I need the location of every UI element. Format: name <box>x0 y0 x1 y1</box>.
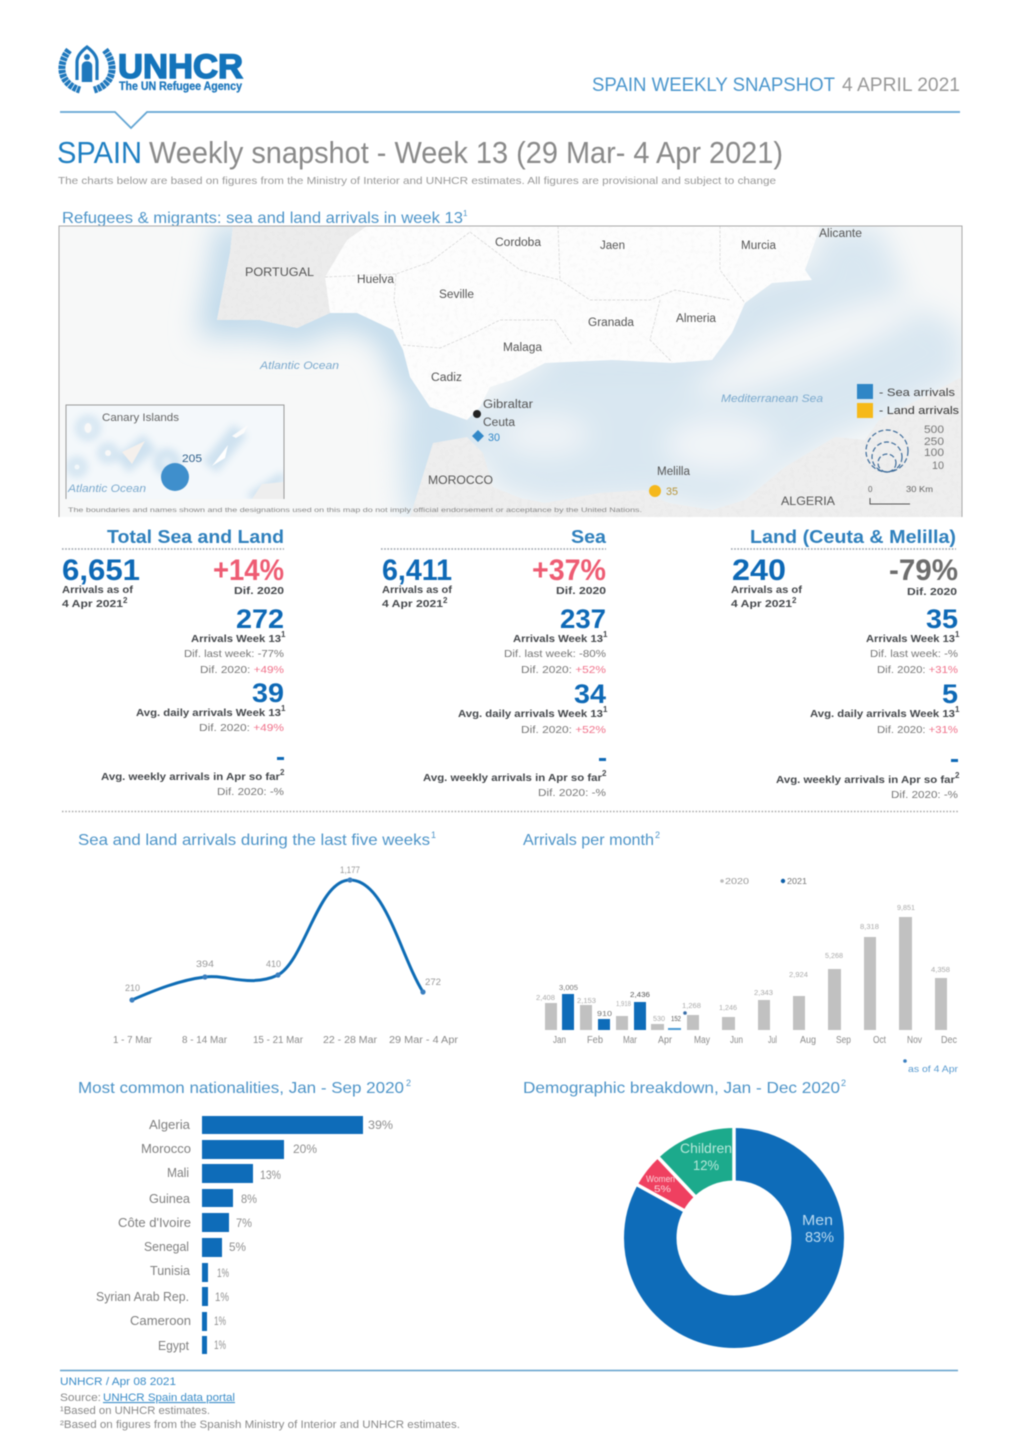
bar values: 1,918 <box>616 1001 631 1008</box>
map place labels: Malaga <box>503 342 543 354</box>
heading: arrivals per month: Arrivals per month <box>523 832 654 849</box>
arrivals week 13 <box>504 604 608 676</box>
heading: arrivals per month: 2 <box>655 830 660 840</box>
sea labels: Mediterranean Sea <box>721 393 823 405</box>
arrivals week 13: 1 <box>281 630 286 639</box>
average weekly: 2 <box>280 768 285 777</box>
average weekly: Avg. weekly arrivals in Apr so far <box>423 772 602 784</box>
bar values: 1,268 <box>682 1003 701 1010</box>
percentage labels: 1% <box>215 1292 229 1304</box>
percentage labels: 13% <box>260 1170 281 1182</box>
inset sea label: Atlantic Ocean <box>67 483 146 495</box>
bar values: 1,246 <box>719 1005 737 1012</box>
panel: sea <box>381 527 608 799</box>
total arrivals <box>382 554 453 610</box>
average daily: 1 <box>281 704 286 713</box>
map place labels: Melilla <box>657 466 691 478</box>
footer source: UNHCR Spain data portal <box>103 1392 235 1404</box>
map place labels: Granada <box>588 317 635 329</box>
map place labels: Jaen <box>600 240 625 252</box>
average weekly <box>101 757 285 798</box>
bar values: 530 <box>653 1016 665 1023</box>
total arrivals: 240 <box>732 554 786 587</box>
month labels <box>553 1035 957 1046</box>
map disclaimer: The boundaries and names shown and the designations used on this map do not imply official endorsement or acceptance by the United Nations. <box>68 507 642 514</box>
map legend: - Land arrivals <box>879 405 960 417</box>
map place labels: Almeria <box>676 313 717 325</box>
line chart: last five weeks: 272 <box>425 977 441 987</box>
line chart: last five weeks: 15 - 21 Mar <box>253 1035 304 1046</box>
logo tagline: The UN Refugee Agency <box>119 81 243 93</box>
total arrivals: Arrivals as of <box>382 584 453 596</box>
average daily: 39 <box>252 678 284 708</box>
month labels: May <box>694 1035 710 1046</box>
subtitle: The charts below are based on figures from the Ministry of Interior and UNHCR estimates. All figures are provisional and subject to change <box>58 175 776 187</box>
heading: Total Sea and Land <box>107 527 284 547</box>
line chart: last five weeks: 8 - 14 Mar <box>182 1035 228 1046</box>
line chart: last five weeks: 1 - 7 Mar <box>113 1035 153 1046</box>
average daily: Dif. 2020: +49% <box>199 722 284 734</box>
heading: demographic: Demographic breakdown, Jan - Dec 2020 <box>523 1080 840 1097</box>
average daily: 1 <box>603 705 608 714</box>
header label: SPAIN WEEKLY SNAPSHOT <box>592 75 835 96</box>
month labels: Oct <box>873 1035 886 1046</box>
panel: total sea and land <box>62 527 286 798</box>
country labels: Syrian Arab Rep. <box>96 1290 189 1304</box>
map place labels: PORTUGAL <box>245 267 315 279</box>
heading: five weeks: 1 <box>431 830 436 840</box>
line chart: last five weeks: 22 - 28 Mar <box>323 1035 378 1046</box>
logo wordmark: UNHCR <box>118 48 243 86</box>
label: women <box>646 1174 675 1194</box>
label: men: 83% <box>805 1229 834 1246</box>
percentage labels: 5% <box>229 1242 246 1254</box>
inset: Canary Islands <box>66 405 284 499</box>
country labels: Guinea <box>149 1192 190 1206</box>
line chart: last five weeks <box>113 865 459 1046</box>
average daily: Dif. 2020: +52% <box>521 724 606 736</box>
average weekly: Dif. 2020: -% <box>538 787 606 799</box>
bar values: 8,318 <box>860 924 879 931</box>
average weekly <box>423 758 607 799</box>
average weekly <box>776 759 960 801</box>
total arrivals: 6,411 <box>382 554 452 587</box>
bar values: 2,153 <box>577 998 596 1005</box>
land: Spain <box>326 226 820 420</box>
average daily: 34 <box>574 679 606 709</box>
line chart: last five weeks: 410 <box>266 959 281 969</box>
average weekly: Avg. weekly arrivals in Apr so far <box>776 774 955 786</box>
total arrivals: Arrivals as of <box>62 584 134 596</box>
bar values: 4,358 <box>931 967 950 974</box>
difference 2020: Dif. 2020 <box>234 585 284 597</box>
inset title: Canary Islands <box>102 412 180 424</box>
land: Portugal <box>217 226 367 328</box>
difference 2020: Dif. 2020 <box>556 585 606 597</box>
map legend <box>857 384 960 418</box>
average daily: Avg. daily arrivals Week 13 <box>136 707 281 719</box>
map place labels: ALGERIA <box>781 496 835 508</box>
month labels: Aug <box>800 1035 816 1046</box>
total arrivals: 2 <box>443 596 448 605</box>
month labels: Feb <box>587 1035 603 1046</box>
footnote 2: ²Based on figures from the Spanish Ministry of Interior and UNHCR estimates. <box>60 1419 460 1431</box>
total arrivals: Arrivals as of <box>731 584 803 596</box>
bars 2021 <box>562 994 681 1030</box>
bar values: 2,408 <box>536 995 555 1002</box>
sea glow <box>217 226 962 517</box>
country labels: Cameroon <box>130 1314 191 1328</box>
country labels: Algeria <box>149 1118 190 1132</box>
arrivals week 13 <box>866 604 960 676</box>
scale bar <box>868 485 933 504</box>
title: Weekly snapshot - Week 13 (29 Mar- 4 Apr 2021) <box>149 135 783 170</box>
percentage labels: 1% <box>217 1268 229 1280</box>
arrivals week 13: Dif. last week: -77% <box>184 648 284 660</box>
marker: Ceuta sea arrivals: 30 <box>488 432 500 444</box>
proportional symbol legend <box>866 424 944 472</box>
arrivals week 13: Arrivals Week 13 <box>513 633 603 645</box>
heading: nationalities: 2 <box>406 1078 411 1088</box>
chart legend: 2020 <box>725 877 750 886</box>
percentage labels: 39% <box>368 1120 393 1132</box>
label: children: 12% <box>693 1157 719 1173</box>
bar values: 5,268 <box>825 953 843 960</box>
average daily: 1 <box>955 705 960 714</box>
bar chart: arrivals per month <box>536 877 958 1075</box>
arrivals week 13: 1 <box>603 630 608 639</box>
bars <box>202 1116 363 1354</box>
percentage labels: 1% <box>214 1340 226 1352</box>
map place labels: Cordoba <box>495 237 542 249</box>
map legend: - Sea arrivals <box>879 387 956 399</box>
donut chart: demographic breakdown <box>634 1122 834 1322</box>
country labels: Senegal <box>144 1240 189 1254</box>
label: men <box>802 1212 834 1246</box>
country labels: Mali <box>167 1166 189 1180</box>
title: SPAIN <box>57 135 142 170</box>
arrivals week 13: 237 <box>560 604 606 634</box>
bar values: 3,005 <box>559 985 578 992</box>
heading: nationalities: Most common nationalities, Jan - Sep 2020 <box>78 1080 404 1097</box>
map place labels: Seville <box>439 289 474 301</box>
arrivals week 13: Dif. 2020: +52% <box>521 664 606 676</box>
arrivals week 13: Dif. last week: -80% <box>504 648 606 660</box>
average daily: Avg. daily arrivals Week 13 <box>458 708 603 720</box>
label: children <box>680 1140 732 1173</box>
bar values <box>536 905 950 1023</box>
country labels: Tunisia <box>150 1264 190 1278</box>
map place labels: Murcia <box>741 240 777 252</box>
map place labels: Alicante <box>819 228 862 240</box>
sea labels: Atlantic Ocean <box>259 360 339 372</box>
arrivals week 13: 35 <box>926 604 958 634</box>
total arrivals <box>731 554 803 610</box>
average daily <box>458 679 608 736</box>
map place labels: Gibraltar <box>483 399 533 411</box>
chart note <box>903 1059 958 1075</box>
chart legend: 2021 <box>787 877 808 886</box>
marker: Canary Islands sea arrivals <box>161 453 202 491</box>
proportional symbol legend: 100 <box>924 447 944 459</box>
arrivals week 13 <box>184 604 286 676</box>
arrivals week 13: Dif. 2020: +31% <box>877 664 958 676</box>
average weekly: Avg. weekly arrivals in Apr so far <box>101 771 280 783</box>
total arrivals: 6,651 <box>62 554 140 587</box>
header: logo <box>62 47 243 93</box>
country labels: Côte d'Ivoire <box>118 1216 191 1230</box>
month labels: Dec <box>941 1035 957 1046</box>
label: children: Children <box>680 1140 732 1156</box>
bar values: 2,343 <box>754 990 773 997</box>
land: Africa <box>410 377 962 517</box>
header label: 4 APRIL 2021 <box>842 75 960 96</box>
arrivals week 13: 272 <box>236 604 284 634</box>
line chart: last five weeks: 29 Mar - 4 Apr <box>389 1035 459 1046</box>
average weekly: Dif. 2020: -% <box>217 786 284 798</box>
map place labels: MOROCCO <box>428 475 493 487</box>
month labels: Mar <box>623 1035 638 1046</box>
arrivals week 13: Arrivals Week 13 <box>866 633 955 645</box>
month labels: Nov <box>907 1035 922 1046</box>
average daily: 5 <box>942 679 958 709</box>
proportional symbol legend: 10 <box>932 460 944 472</box>
footer <box>60 1376 460 1431</box>
country labels: Egypt <box>158 1339 190 1353</box>
total arrivals: 2 <box>123 596 128 605</box>
bar values: 9,851 <box>897 905 915 912</box>
percentage labels: 1% <box>214 1316 226 1328</box>
footer source: Source: <box>60 1392 101 1404</box>
average weekly: Dif. 2020: -% <box>891 789 958 801</box>
total arrivals: 4 Apr 2021 <box>382 598 443 610</box>
month labels: Jul <box>768 1035 777 1046</box>
average daily: Dif. 2020: +31% <box>877 724 958 736</box>
total arrivals: 2 <box>792 596 797 605</box>
average weekly: 2 <box>602 769 607 778</box>
map place labels: Ceuta <box>483 417 516 429</box>
average weekly: 2 <box>955 771 960 780</box>
proportional symbol legend: 250 <box>924 436 944 448</box>
line chart: last five weeks: 394 <box>196 959 214 969</box>
bars 2020 <box>545 917 947 1030</box>
average daily <box>810 679 960 736</box>
marker: Melilla land arrivals: 35 <box>666 486 678 498</box>
label: men: Men <box>802 1212 833 1229</box>
percentage labels: 8% <box>241 1194 257 1206</box>
difference 2020: +14% <box>213 554 284 587</box>
map heading: Refugees & migrants: sea and land arrivals in week 13 <box>62 210 463 227</box>
month labels: Jan <box>553 1035 566 1046</box>
average daily <box>136 678 286 734</box>
proportional symbol legend: 500 <box>924 424 944 436</box>
icon: UNHCR emblem <box>62 47 112 90</box>
month labels: Apr <box>658 1035 673 1046</box>
difference 2020: Dif. 2020 <box>907 586 957 598</box>
panel: map <box>59 226 962 517</box>
bar values: 2,436 <box>630 992 650 999</box>
difference 2020: +37% <box>532 554 606 587</box>
map place labels: Huelva <box>357 274 395 286</box>
sea labels <box>259 360 823 405</box>
month labels: Sep <box>836 1035 851 1046</box>
average daily: Avg. daily arrivals Week 13 <box>810 708 955 720</box>
map place labels <box>245 228 862 508</box>
chart legend <box>720 877 808 886</box>
footnote 1: ¹Based on UNHCR estimates. <box>60 1405 210 1417</box>
country labels: Morocco <box>141 1142 191 1156</box>
scale bar: 0 <box>868 485 873 494</box>
bar values: 910 <box>597 1011 612 1018</box>
percentage labels: 20% <box>293 1144 317 1156</box>
heading: demographic: 2 <box>841 1078 846 1088</box>
country labels <box>96 1118 191 1353</box>
scale bar: 30 Km <box>906 485 933 494</box>
bar values: 2,924 <box>789 972 808 979</box>
arrivals week 13: Arrivals Week 13 <box>191 633 281 645</box>
label: women: Women <box>646 1174 675 1184</box>
percentage labels: 7% <box>236 1218 252 1230</box>
heading: Sea <box>571 527 607 547</box>
map place labels: Cadiz <box>431 372 462 384</box>
month labels: Jun <box>730 1035 743 1046</box>
total arrivals: 4 Apr 2021 <box>731 598 792 610</box>
footer date: UNHCR / Apr 08 2021 <box>60 1376 176 1388</box>
marker: Ceuta sea arrivals <box>472 430 500 444</box>
difference 2020: -79% <box>889 554 958 587</box>
percentage labels <box>214 1120 393 1352</box>
marker: Melilla land arrivals <box>649 485 678 498</box>
arrivals week 13: Dif. 2020: +49% <box>200 664 284 676</box>
heading: five weeks: Sea and land arrivals during the last five weeks <box>78 832 430 849</box>
label: women: 5% <box>654 1184 671 1194</box>
line chart: last five weeks: 210 <box>125 983 140 993</box>
chart note: as of 4 Apr <box>908 1064 958 1075</box>
panel: land <box>731 527 960 801</box>
heading: Land (Ceuta & Melilla) <box>750 527 956 547</box>
arrivals week 13: Dif. last week: -% <box>870 648 958 660</box>
bar values: 152 <box>671 1016 681 1023</box>
total arrivals <box>62 554 140 610</box>
total arrivals: 4 Apr 2021 <box>62 598 123 610</box>
marker: Gibraltar <box>473 410 481 418</box>
arrivals week 13: 1 <box>955 630 960 639</box>
marker: Canary Islands sea arrivals: 205 <box>182 453 202 465</box>
header label <box>592 75 960 96</box>
map heading: 1 <box>463 209 468 218</box>
line chart: last five weeks: 1,177 <box>340 865 360 875</box>
bar chart: nationalities <box>96 1116 393 1354</box>
